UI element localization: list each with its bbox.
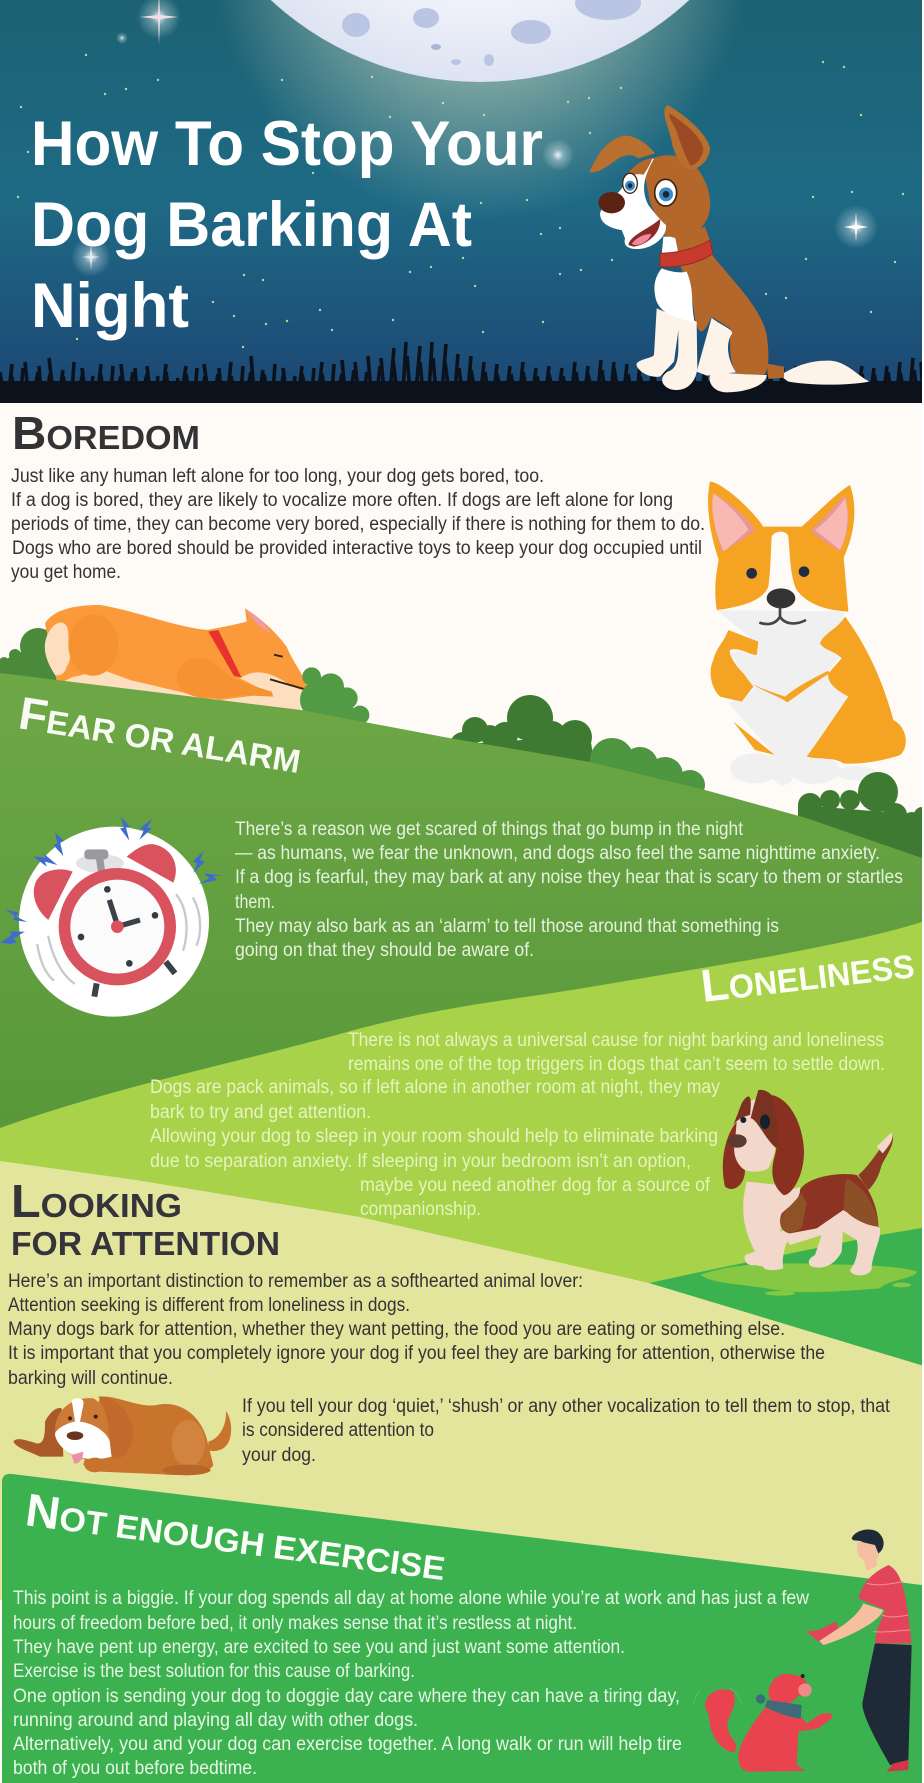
vibration lines bbox=[37, 895, 200, 983]
lightning bolts bbox=[0, 817, 223, 944]
icon: full moon bbox=[172, 0, 788, 82]
panel: not enough exercise bbox=[2, 1474, 922, 1783]
text block: not enough exercise: running around and playing all day with other dogs. bbox=[13, 1710, 418, 1731]
light green wave bbox=[0, 922, 922, 1400]
text block: fear or alarm bbox=[235, 819, 903, 961]
panel: boredom bbox=[11, 407, 906, 785]
heading: looking for attention: FOR ATTENTION bbox=[11, 1225, 280, 1262]
text block: loneliness: There is not always a universal cause for night barking and loneliness bbox=[348, 1030, 884, 1051]
text block: fear or alarm: They may also bark as an ‘alarm’ to tell those around that something is bbox=[235, 916, 779, 937]
text block: boredom: periods of time, they can become very bored, especially if there is nothing for them to do. bbox=[11, 514, 705, 535]
text block: boredom: If a dog is bored, they are likely to vocalize more often. If dogs are left alone for long bbox=[11, 490, 673, 511]
text block: boredom: Just like any human left alone for too long, your dog gets bored, too. bbox=[11, 466, 544, 487]
title: Night bbox=[31, 271, 189, 341]
text block: not enough exercise: both of you out before bedtime. bbox=[13, 1758, 257, 1779]
text block: looking for attention: Here’s an important distinction to remember as a softhearted animal lover: bbox=[8, 1271, 583, 1292]
heading: not enough exercise: NOT ENOUGH EXERCISE bbox=[23, 1483, 449, 1590]
text block: looking for attention bbox=[8, 1271, 891, 1466]
title: How To Stop Your bbox=[31, 109, 543, 179]
text block: looking for attention: Attention seeking is different from loneliness in dogs. bbox=[8, 1295, 410, 1316]
text block: not enough exercise: Alternatively, you and your dog can exercise together. A long walk or run will help tire bbox=[13, 1734, 682, 1755]
text block: fear or alarm: them. bbox=[235, 892, 275, 913]
icon: ringing alarm clock bbox=[0, 817, 223, 1017]
text block: loneliness bbox=[150, 1030, 885, 1220]
text block: not enough exercise: They have pent up energy, are excited to see you and just want some attention. bbox=[13, 1637, 625, 1658]
icon: standing corgi bbox=[708, 482, 906, 785]
panel: header night sky bbox=[0, 0, 924, 403]
text block: fear or alarm: going on that they should be aware of. bbox=[235, 940, 534, 961]
bush: right dark bbox=[798, 772, 924, 870]
text block: loneliness: maybe you need another dog for a source of bbox=[360, 1175, 711, 1196]
icon: basset hound bbox=[700, 1090, 917, 1296]
green hillside bbox=[0, 673, 922, 1140]
green band bbox=[2, 1474, 922, 1783]
right edge margin bbox=[922, 0, 924, 1783]
text block: fear or alarm: There’s a reason we get scared of things that go bump in the night bbox=[235, 819, 744, 840]
text block: not enough exercise: hours of freedom before bed, it only makes sense that it’s restless at night. bbox=[13, 1613, 577, 1634]
text block: looking for attention: If you tell your dog ‘quiet,’ ‘shush’ or any other vocalization to tell them to stop, that bbox=[242, 1396, 891, 1417]
bush: right of sleeping dog bbox=[300, 667, 369, 730]
heading: boredom: BOREDOM bbox=[12, 407, 200, 459]
grass silhouette bbox=[0, 342, 924, 403]
heading: looking for attention bbox=[11, 1175, 280, 1262]
text block: looking for attention: barking will continue. bbox=[8, 1368, 173, 1389]
stars bbox=[17, 54, 904, 348]
heading: loneliness: LONELINESS bbox=[698, 935, 917, 1012]
panel: loneliness bbox=[0, 922, 922, 1400]
text block: loneliness: Allowing your dog to sleep in your room should help to eliminate barking bbox=[150, 1126, 718, 1147]
text block: loneliness: companionship. bbox=[360, 1199, 481, 1220]
text block: not enough exercise bbox=[13, 1588, 809, 1779]
icon: sitting brown and white dog bbox=[589, 105, 869, 392]
text block: looking for attention: Many dogs bark for attention, whether they want petting, the food you are eating or something else. bbox=[8, 1319, 785, 1340]
text block: not enough exercise: One option is sending your dog to doggie day care where they can have a tiring day, bbox=[13, 1686, 680, 1707]
icon: red dog bbox=[694, 1674, 832, 1772]
bright green ground bbox=[640, 1228, 922, 1400]
text block: not enough exercise: This point is a biggie. If your dog spends all day at home alone while you’re at work and has just a few bbox=[13, 1588, 809, 1609]
text block: looking for attention: your dog. bbox=[242, 1445, 316, 1466]
panel: looking for attention bbox=[0, 1161, 924, 1600]
icon: sleeping orange dog bbox=[45, 605, 312, 712]
text block: looking for attention: It is important that you completely ignore your dog if you feel they are barking for attention, otherwise the bbox=[8, 1343, 825, 1364]
heading: fear or alarm: FEAR OR ALARM bbox=[15, 687, 305, 783]
text block: loneliness: bark to try and get attention. bbox=[150, 1102, 371, 1123]
title: Dog Barking At bbox=[31, 190, 472, 260]
text block: boredom: Dogs who are bored should be provided interactive toys to keep your dog occupied until bbox=[12, 538, 702, 559]
text block: loneliness: Dogs are pack animals, so if left alone in another room at night, they may bbox=[150, 1077, 720, 1098]
icon: lying dog bbox=[13, 1397, 231, 1475]
text block: loneliness: due to separation anxiety. If sleeping in your bedroom isn’t an option, bbox=[150, 1151, 691, 1172]
text block: not enough exercise: Exercise is the best solution for this cause of barking. bbox=[13, 1661, 415, 1682]
bush: left of sleeping dog bbox=[0, 628, 58, 685]
pale yellow band bbox=[0, 1161, 924, 1600]
text block: fear or alarm: — as humans, we fear the unknown, and dogs also feel the same nighttime anxiety. bbox=[235, 843, 880, 864]
heading: looking for attention: LOOKING bbox=[11, 1175, 182, 1227]
icon: man with dog bbox=[694, 1530, 912, 1772]
text block: boredom bbox=[11, 466, 705, 583]
text block: looking for attention: is considered attention to bbox=[242, 1420, 434, 1441]
text block: loneliness: remains one of the top triggers in dogs that can’t seem to settle down. bbox=[348, 1054, 885, 1075]
text block: boredom: you get home. bbox=[11, 562, 121, 583]
title bbox=[31, 109, 543, 341]
sparkling stars bbox=[71, 0, 878, 277]
panel: fear or alarm bbox=[0, 605, 924, 1140]
bush: centre light bbox=[590, 738, 705, 800]
bush: centre dark bbox=[450, 695, 595, 770]
